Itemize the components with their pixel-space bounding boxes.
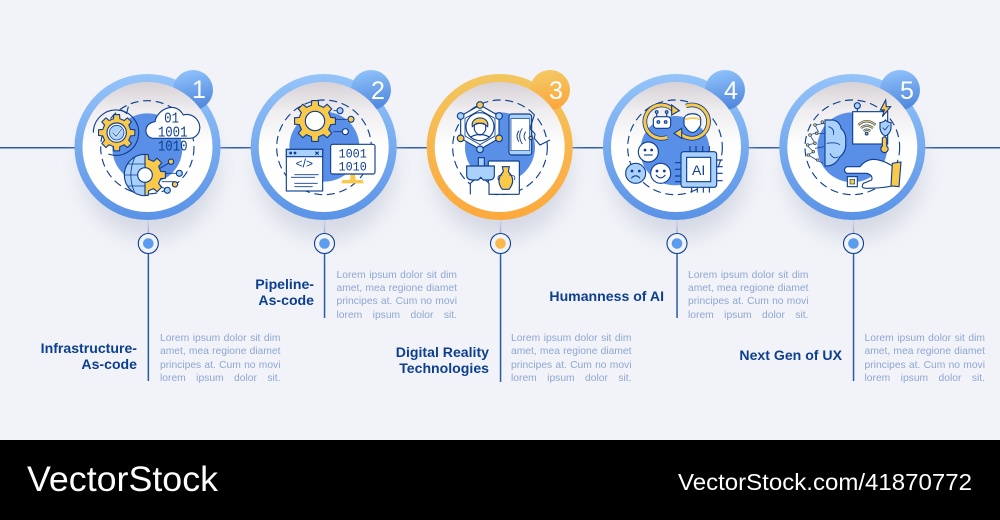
heading 5: Next Gen of UX <box>739 347 842 363</box>
vertical stem 2 <box>324 215 325 318</box>
step 4 circle with icon <box>603 70 749 238</box>
vertical stem 4 <box>676 215 678 318</box>
body text 3: Lorem ipsum dolor sit dim <box>511 333 632 344</box>
body text 3: lorem ipsum dolor sit. <box>511 373 632 384</box>
body text 2 <box>336 270 457 321</box>
footer watermark band <box>0 440 1000 520</box>
heading 1: Infrastructure- <box>41 340 137 356</box>
connector dot 1 <box>138 234 158 254</box>
step 1 circle with icon <box>74 70 220 238</box>
heading 4: Humanness of AI <box>549 288 664 304</box>
icon: gear, code window and monitor: 1001 <box>338 147 367 162</box>
heading 3: Technologies <box>399 360 489 376</box>
heading 1: As-code <box>81 356 137 372</box>
heading 3 <box>396 344 489 376</box>
icon: brain, smart panel and hand with chip <box>805 100 901 195</box>
number badge 2 <box>259 70 391 212</box>
step 2 circle with icon <box>251 70 397 238</box>
body text 1: Lorem ipsum dolor sit dim <box>160 333 280 344</box>
heading 2: Pipeline- <box>255 276 314 292</box>
icon: cloud, gears and globe: 1010 <box>158 140 187 156</box>
body text 5: Lorem ipsum dolor sit dim <box>864 333 985 344</box>
icon: gear, code window and monitor: 1010 <box>338 160 367 175</box>
vertical stem 1 <box>148 215 149 381</box>
heading 1 <box>41 340 137 372</box>
footer image reference: VectorStock.com/41870772 <box>678 469 972 495</box>
connector dot 5 <box>844 234 864 254</box>
body text 2: Lorem ipsum dolor sit dim <box>336 270 457 280</box>
heading 2: As-code <box>258 292 314 308</box>
heading 2 <box>255 276 314 308</box>
step 5 circle with icon <box>779 70 925 238</box>
number badge 3 <box>435 70 570 212</box>
connector dot 3 <box>490 234 510 254</box>
body text 3: amet, mea regione diamet <box>511 346 632 357</box>
connector dot 2 <box>314 234 334 254</box>
step 3 circle with icon <box>427 70 573 238</box>
body text 3 <box>511 333 632 384</box>
body text 5: amet, mea regione diamet <box>864 346 985 357</box>
footer brand name: VectorStock <box>27 460 219 499</box>
number badge 5: 5 <box>900 77 914 105</box>
body text 5: lorem ipsum dolor sit. <box>864 373 985 384</box>
icon: robot, faces and AI chip <box>626 100 723 195</box>
body text 4: principes at. Cum no movi <box>688 296 808 307</box>
icon: robot, faces and AI chip: AI <box>692 162 705 178</box>
vertical stem 5 <box>853 215 854 381</box>
horizontal timeline <box>0 147 1000 148</box>
icon: cloud, gears and globe: 01 <box>164 111 179 127</box>
body text 1 <box>160 333 280 384</box>
heading 3: Digital Reality <box>396 344 489 360</box>
number badge 1 <box>82 70 213 212</box>
vertical stem 3 <box>500 215 501 382</box>
body text 3: principes at. Cum no movi <box>511 360 632 371</box>
icon: cloud, gears and globe <box>93 101 200 196</box>
number badge 2: 2 <box>371 77 385 105</box>
body text 1: amet, mea regione diamet <box>160 346 280 357</box>
body text 1: lorem ipsum dolor sit. <box>160 373 280 384</box>
number badge 4: 4 <box>724 77 738 105</box>
body text 4: Lorem ipsum dolor sit dim <box>688 270 808 280</box>
body text 2: principes at. Cum no movi <box>336 296 457 307</box>
body text 5 <box>864 333 985 384</box>
connector dot 4 <box>667 234 687 254</box>
icon: gear, code window and monitor: </> <box>296 157 313 171</box>
body text 2: lorem ipsum dolor sit. <box>336 310 457 321</box>
number badge 5 <box>787 70 920 212</box>
body text 4: amet, mea regione diamet <box>688 283 808 294</box>
icon: avatar network, phone voice and VR <box>453 100 550 195</box>
number badge 4 <box>611 70 745 212</box>
number badge 3: 3 <box>549 77 563 105</box>
number badge 1: 1 <box>192 76 206 104</box>
body text 4: lorem ipsum dolor sit. <box>688 310 808 321</box>
icon: cloud, gears and globe: 1001 <box>158 126 188 142</box>
body text 2: amet, mea regione diamet <box>336 283 457 294</box>
body text 5: principes at. Cum no movi <box>864 360 985 371</box>
body text 4 <box>688 270 808 321</box>
icon: gear, code window and monitor <box>277 100 375 195</box>
body text 1: principes at. Cum no movi <box>160 360 280 371</box>
